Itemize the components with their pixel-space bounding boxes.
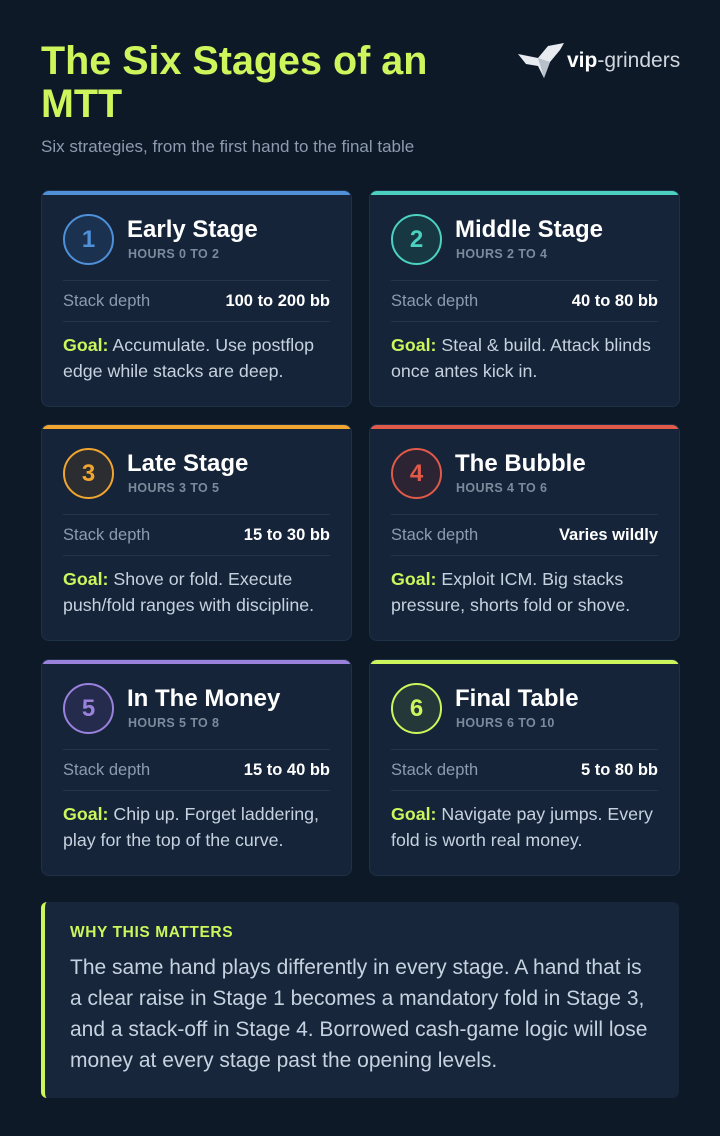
heading: The Bubble bbox=[455, 450, 586, 477]
stack depth row: 100 to 200 bb bbox=[225, 292, 330, 310]
goal text: Goal: Accumulate. Use postflop edge while stacks are deep. bbox=[63, 335, 314, 381]
card: in the money: HOURS 5 TO 8 bbox=[128, 716, 219, 730]
callout: why this matters bbox=[41, 902, 679, 1098]
card: middle stage: HOURS 2 TO 4 bbox=[456, 247, 547, 261]
card: the bubble: HOURS 4 TO 6 bbox=[456, 481, 547, 495]
callout text: a clear raise in Stage 1 becomes a mandatory fold in Stage 3, bbox=[70, 987, 644, 1010]
icon: number 4: 4 bbox=[410, 460, 423, 487]
stack depth row: 5 to 80 bb bbox=[581, 761, 658, 779]
icon: number 6 bbox=[391, 683, 442, 734]
title: The Six Stages of an MTT bbox=[41, 39, 427, 126]
card: middle stage bbox=[369, 190, 680, 407]
heading: In The Money bbox=[127, 685, 280, 712]
stack depth row: Stack depth bbox=[391, 292, 478, 310]
icon: number 5: 5 bbox=[82, 695, 95, 722]
stack depth row: Stack depth bbox=[63, 526, 150, 544]
stack depth row bbox=[63, 749, 330, 791]
goal text: Goal: Navigate pay jumps. Every fold is worth real money. bbox=[391, 804, 653, 850]
logo: vip-grinders bbox=[518, 43, 680, 78]
goal text: Goal: Shove or fold. Execute push/fold ranges with discipline. bbox=[63, 569, 314, 615]
stack depth row bbox=[391, 514, 658, 556]
card: final table bbox=[369, 659, 680, 876]
callout: why this matters: WHY THIS MATTERS bbox=[70, 924, 233, 941]
stack depth row: Stack depth bbox=[391, 526, 478, 544]
icon: number 3: 3 bbox=[82, 460, 95, 487]
stack depth row bbox=[391, 280, 658, 322]
subtitle: Six strategies, from the first hand to the final table bbox=[41, 137, 414, 156]
stack depth row: 15 to 40 bb bbox=[244, 761, 330, 779]
icon: number 3 bbox=[63, 448, 114, 499]
card: late stage bbox=[41, 424, 352, 641]
stack depth row bbox=[63, 280, 330, 322]
stack depth row bbox=[391, 749, 658, 791]
stack depth row bbox=[63, 514, 330, 556]
icon: number 5 bbox=[63, 683, 114, 734]
stack depth row: 40 to 80 bb bbox=[572, 292, 658, 310]
callout text: and a stack-off in Stage 4. Borrowed cash-game logic will lose bbox=[70, 1018, 647, 1041]
stack depth row: 15 to 30 bb bbox=[244, 526, 330, 544]
heading: Late Stage bbox=[127, 450, 248, 477]
heading: Middle Stage bbox=[455, 216, 603, 243]
goal text: Goal: Chip up. Forget laddering, play for the top of the curve. bbox=[63, 804, 319, 850]
goal text: Goal: Exploit ICM. Big stacks pressure, shorts fold or shove. bbox=[391, 569, 630, 615]
logo: vip-grinders: vip-grinders bbox=[567, 49, 680, 72]
card: early stage: HOURS 0 TO 2 bbox=[128, 247, 219, 261]
icon: number 2: 2 bbox=[410, 226, 423, 253]
stack depth row: Stack depth bbox=[391, 761, 478, 779]
card: early stage bbox=[41, 190, 352, 407]
stack depth row: Varies wildly bbox=[559, 526, 658, 544]
icon: number 6: 6 bbox=[410, 695, 423, 722]
callout text: money at every stage past the opening levels. bbox=[70, 1049, 497, 1072]
goal text: Goal: Steal & build. Attack blinds once antes kick in. bbox=[391, 335, 651, 381]
callout text bbox=[70, 956, 647, 1072]
stack depth row: Stack depth bbox=[63, 292, 150, 310]
card: the bubble bbox=[369, 424, 680, 641]
icon: number 1: 1 bbox=[82, 226, 95, 253]
stack depth row: Stack depth bbox=[63, 761, 150, 779]
heading: Early Stage bbox=[127, 216, 258, 243]
heading: Final Table bbox=[455, 685, 579, 712]
card: late stage: HOURS 3 TO 5 bbox=[128, 481, 219, 495]
icon: number 4 bbox=[391, 448, 442, 499]
icon: number 2 bbox=[391, 214, 442, 265]
card: in the money bbox=[41, 659, 352, 876]
icon: number 1 bbox=[63, 214, 114, 265]
callout text: The same hand plays differently in every stage. A hand that is bbox=[70, 956, 642, 979]
card: final table: HOURS 6 TO 10 bbox=[456, 716, 555, 730]
